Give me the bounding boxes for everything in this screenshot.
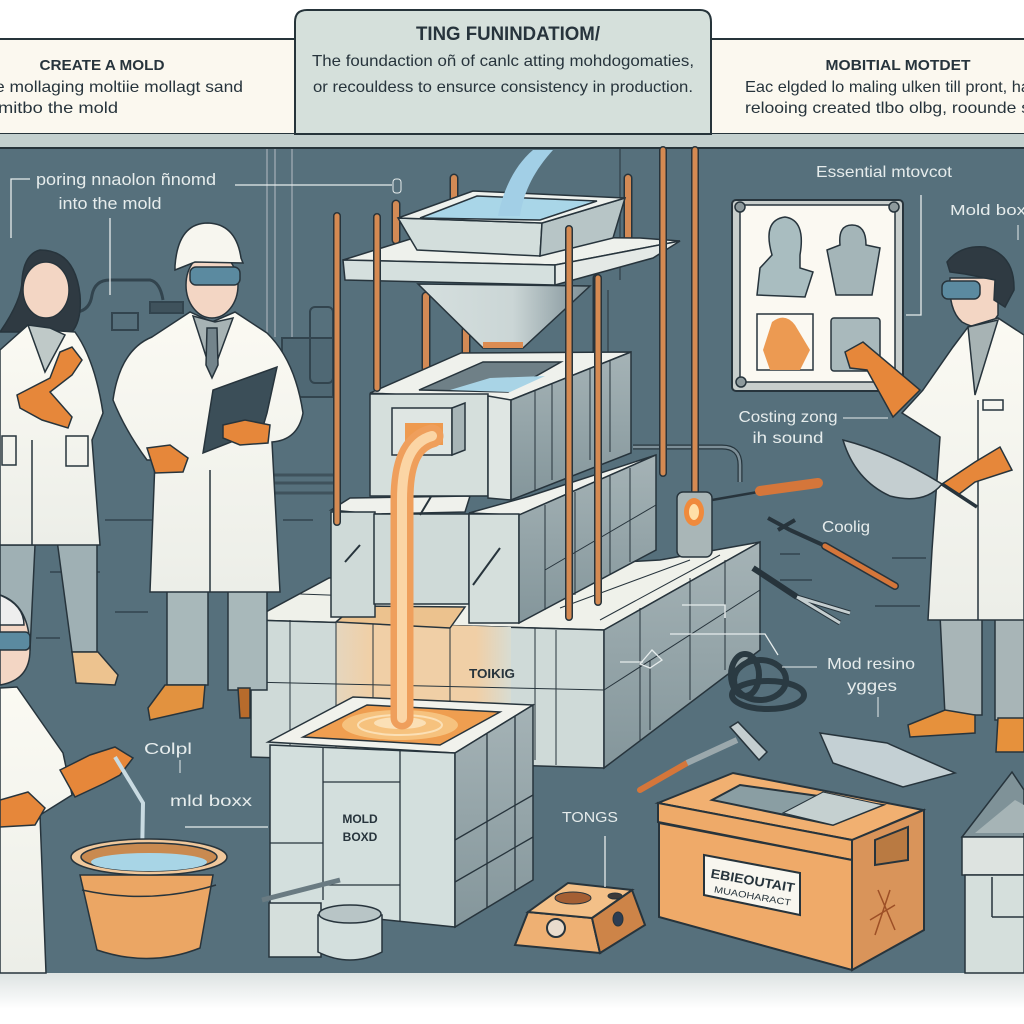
label: tongs	[562, 809, 618, 887]
left header panel	[0, 57, 243, 117]
upper furnace block	[370, 352, 631, 500]
right annotations: ygges	[847, 678, 897, 695]
label: mold box	[342, 812, 378, 844]
small orange mold block	[515, 883, 645, 953]
shelf, hopper and funnel	[343, 191, 680, 348]
person: lower left worker	[0, 595, 143, 973]
annotation: pouring label: poring nnaolon ñnomd	[36, 170, 216, 189]
back support rods	[396, 178, 628, 368]
right annotations: Essential mtovcot	[816, 164, 953, 181]
label: colpl: Colpl	[144, 741, 192, 758]
concrete corner box	[962, 772, 1024, 973]
orange supply box: EBIEOUTAIT	[710, 866, 796, 895]
background pipes and machinery	[36, 148, 926, 638]
person: woman left	[0, 250, 118, 685]
ladle held by engineer	[843, 440, 977, 507]
terracotta water pot	[71, 839, 227, 959]
crucible and handle	[677, 483, 818, 557]
base block	[251, 542, 760, 768]
center header panel	[295, 10, 711, 134]
stream: molten metal	[402, 436, 432, 718]
label: mold box: MOLD	[342, 812, 378, 826]
annotation: pouring label	[11, 170, 401, 295]
bottom fade strip	[0, 973, 1024, 1009]
left header panel: CREATE A MOLD	[40, 57, 165, 74]
label: tongs: TONGS	[562, 809, 618, 826]
label: colpl: mld boxx	[170, 793, 252, 810]
orange supply box: MUAOHARACT	[713, 884, 792, 908]
label: colpl	[144, 741, 268, 827]
pliers tool	[753, 568, 850, 623]
small bucket and tongs	[262, 880, 382, 960]
right annotations: Coolig	[822, 519, 870, 536]
middle blocks	[331, 455, 656, 623]
center header panel: TING FUNINDATIOM/	[416, 24, 601, 45]
right annotations: Mod resino	[827, 656, 915, 673]
person: helmet engineer	[113, 223, 303, 720]
label: mold box: BOXD	[343, 830, 378, 844]
annotation: pouring label: into the mold	[58, 194, 162, 213]
right annotations: Costing zong	[738, 409, 838, 426]
rock sample	[820, 733, 955, 787]
right header panel: MOBITIAL MOTDET	[826, 57, 970, 74]
front support rods	[337, 150, 695, 617]
center header panel: The foundaction oñ of canlc atting mohdogomaties,	[312, 53, 694, 70]
label: toiking: TOIKIG	[469, 666, 515, 681]
stream: water pour	[498, 150, 553, 216]
display board with molds	[732, 200, 903, 391]
right annotations: Mold box	[950, 202, 1024, 219]
left header panel: mitbo the mold	[0, 100, 118, 117]
right header panel: relooing created tlbo olbg, roounde s	[745, 100, 1024, 117]
front mold box	[268, 697, 533, 927]
header band	[0, 39, 1024, 149]
person: right engineer	[845, 247, 1024, 752]
leader lines on base	[620, 605, 778, 668]
chain	[731, 654, 804, 709]
center header panel: or recouldess to ensurce consistency in production.	[313, 79, 693, 96]
right annotations: ih sound	[752, 430, 824, 447]
left header panel: e mollaging moltiie mollagt sand	[0, 79, 243, 96]
right header panel: Eac elgded lo maling ulken till pront, ha	[745, 79, 1024, 96]
right header panel	[745, 57, 1024, 117]
right annotations	[738, 164, 1024, 717]
wrench tool	[768, 518, 895, 586]
orange supply box	[658, 773, 924, 970]
hammer	[640, 722, 767, 790]
